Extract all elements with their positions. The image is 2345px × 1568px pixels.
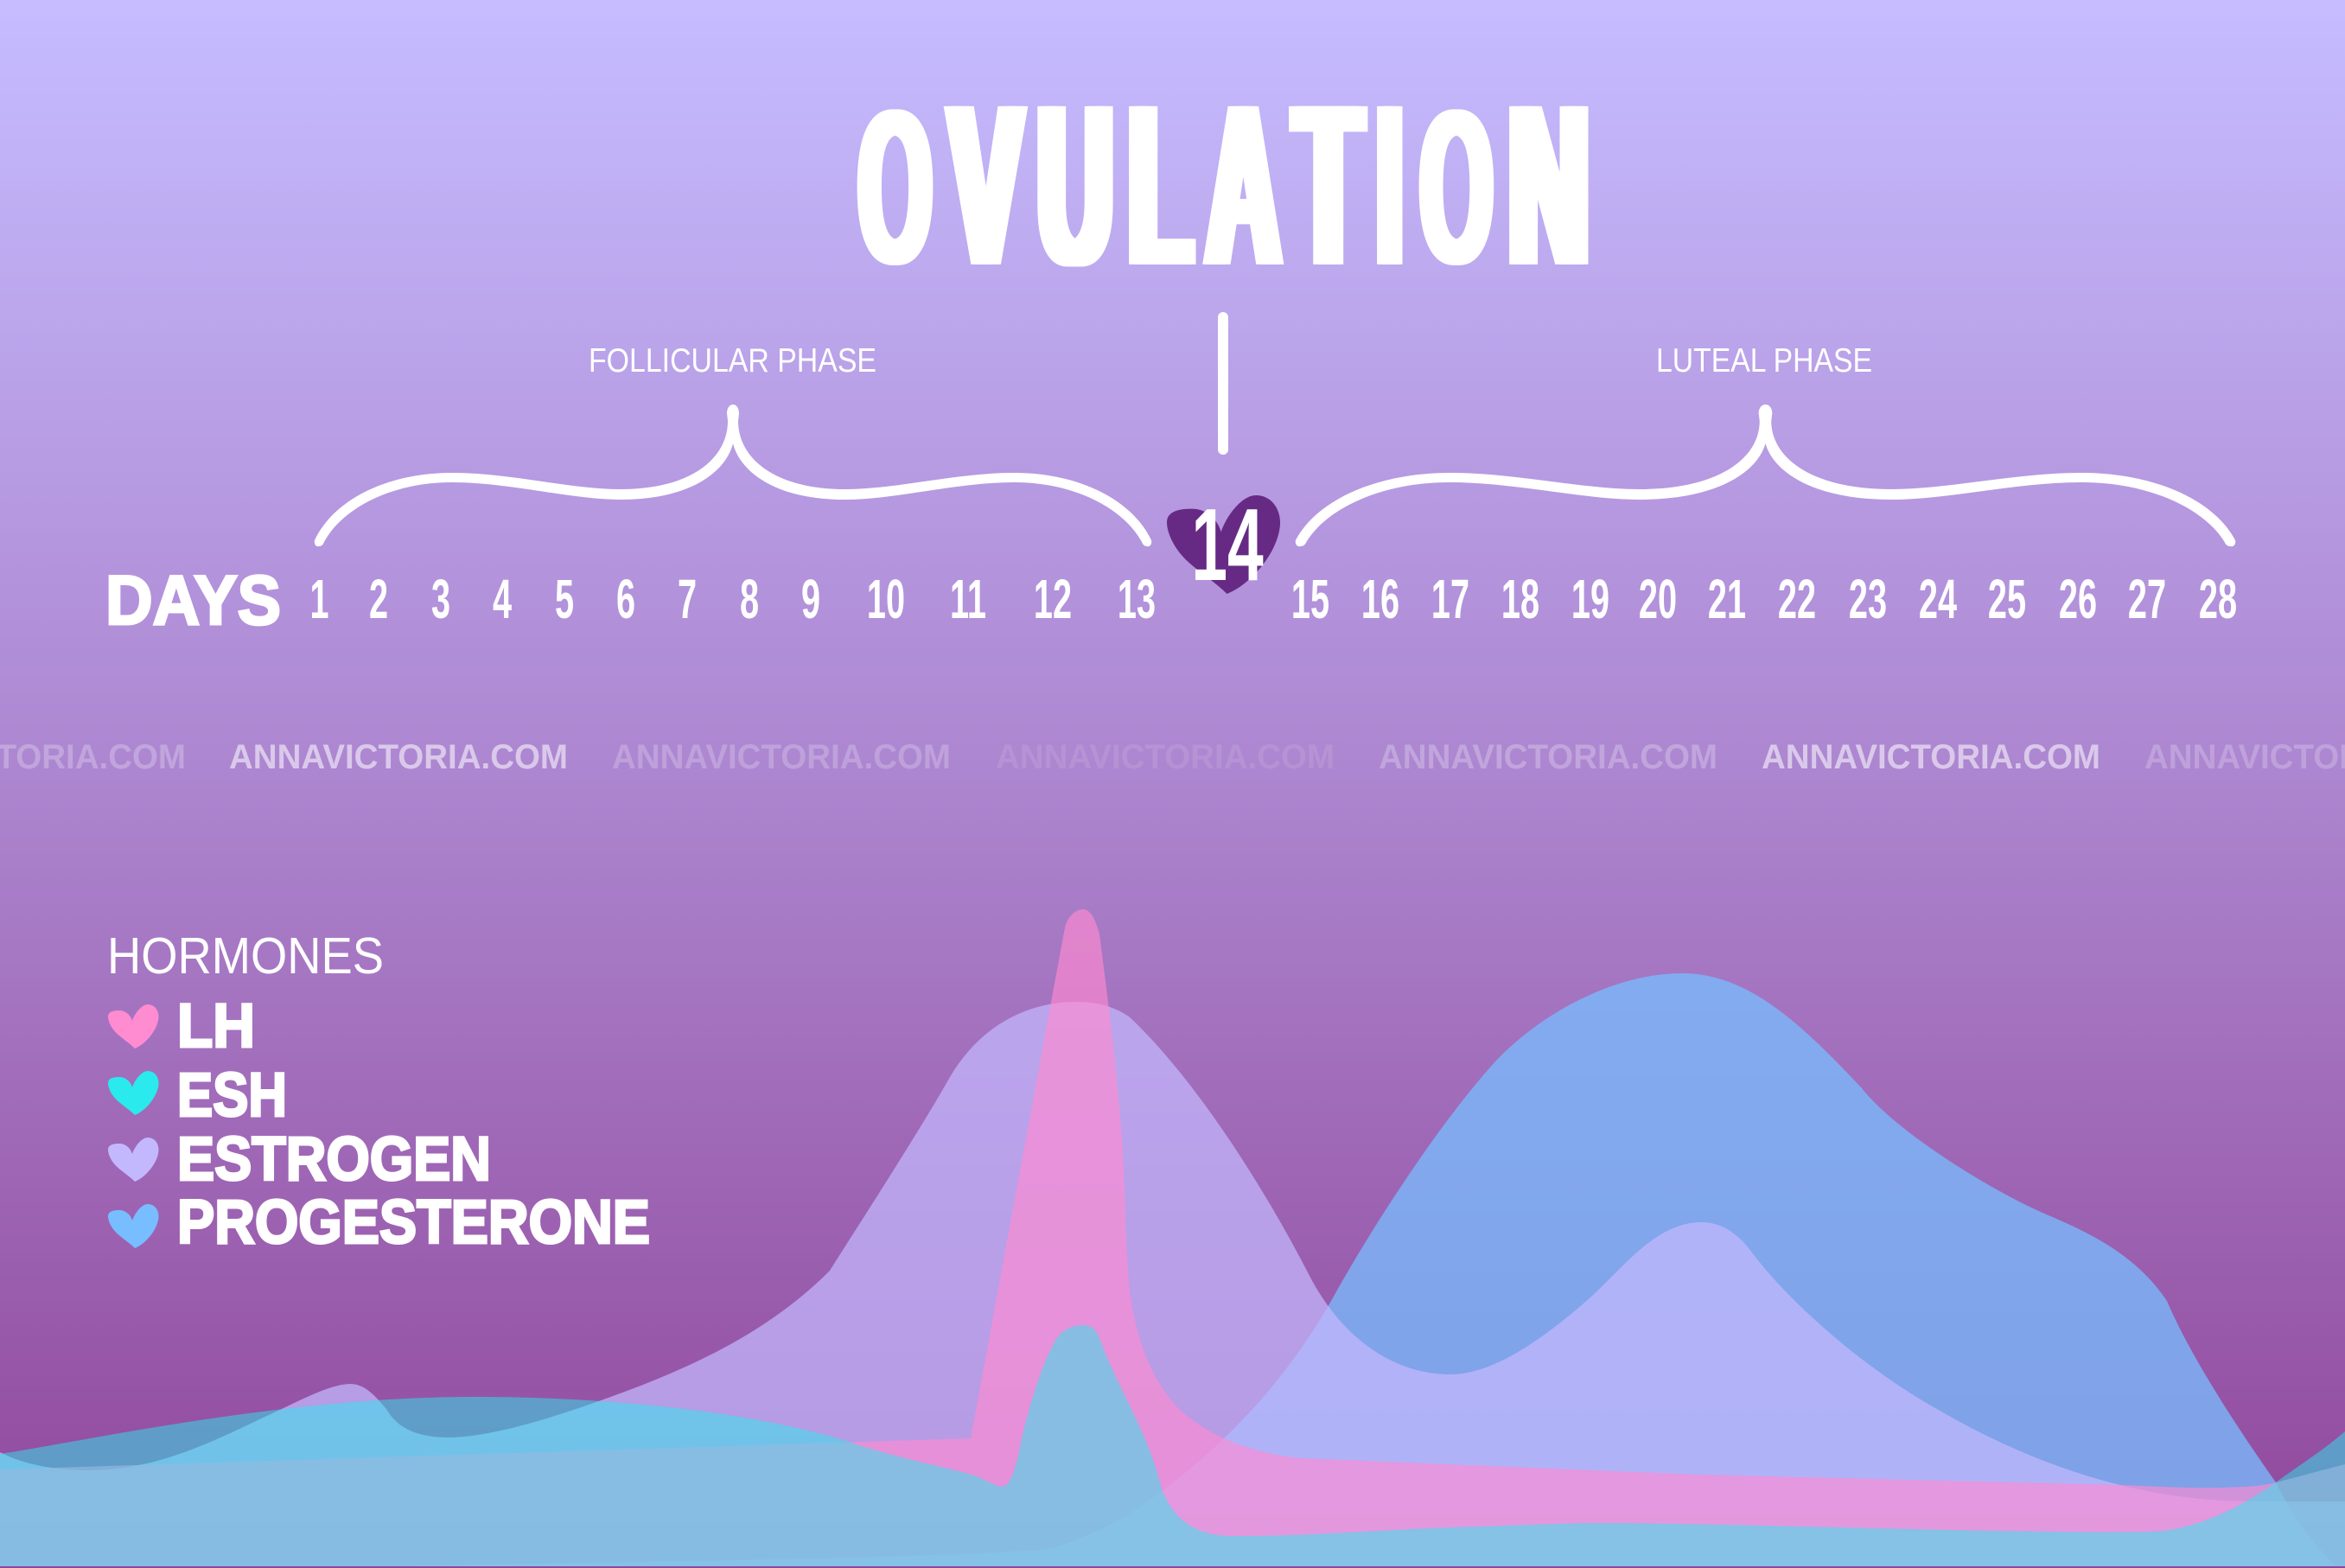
luteal brace	[1296, 405, 2235, 546]
phase label: follicular: FOLLICULAR PHASE	[589, 342, 876, 379]
day numbers row: 1	[309, 570, 329, 630]
icon: ESH heart	[108, 1071, 159, 1115]
title	[855, 58, 1589, 335]
legend label: progesterone: PROGESTERONE	[177, 1189, 650, 1257]
title: O	[855, 74, 935, 335]
legend heading: HORMONES	[107, 927, 384, 985]
watermark row	[0, 738, 2345, 776]
day numbers row: 20	[1639, 570, 1677, 630]
icon: day 14 heart	[1167, 495, 1280, 594]
icon: estrogen heart	[108, 1138, 159, 1182]
title: O	[1416, 74, 1495, 335]
area: FSH	[0, 1325, 2345, 1566]
day numbers row: 7	[678, 570, 697, 630]
title: T	[1295, 58, 1361, 316]
day numbers row: 3	[431, 570, 450, 630]
watermark row: ANNAVICTORIA.COM	[1762, 738, 2100, 776]
phase label: luteal: LUTEAL PHASE	[1656, 342, 1872, 379]
day 14 number: 14	[1191, 488, 1264, 602]
day numbers row: 4	[493, 570, 512, 630]
day numbers row: 2	[369, 570, 388, 630]
area: estrogen	[0, 1002, 2345, 1566]
legend	[107, 927, 650, 1257]
hormone area chart	[0, 909, 2345, 1566]
watermark row: ANNAVICTORIA.COM	[612, 738, 951, 776]
watermark row: ANNAVICTORIA.COM	[996, 738, 1335, 776]
day numbers row: 28	[2199, 570, 2237, 630]
day numbers row: 23	[1849, 570, 1887, 630]
day numbers row: 10	[867, 570, 905, 630]
day numbers row: 11	[950, 570, 986, 630]
legend label: estrogen: ESTROGEN	[177, 1125, 491, 1194]
watermark row: ANNAVICTORIA.COM	[229, 738, 568, 776]
title: L	[1129, 58, 1192, 316]
area: progesterone	[389, 973, 2336, 1566]
day numbers row: 26	[2059, 570, 2097, 630]
icon: progesterone heart	[108, 1204, 159, 1248]
legend label: LH: LH	[177, 992, 255, 1061]
icon: LH heart	[108, 1004, 159, 1049]
day numbers row	[309, 570, 2237, 630]
day numbers row: 16	[1361, 570, 1399, 630]
follicular brace	[315, 405, 1151, 546]
day numbers row: 8	[740, 570, 759, 630]
day numbers row: 6	[616, 570, 635, 630]
watermark row: ANNAVICTORIA.COM	[1379, 738, 1717, 776]
title: V	[950, 58, 1022, 316]
legend label: ESH: ESH	[177, 1061, 287, 1130]
day numbers row: 5	[555, 570, 574, 630]
area: LH	[0, 909, 2345, 1566]
day numbers row: 18	[1501, 570, 1539, 630]
day numbers row: 24	[1919, 570, 1957, 630]
ovulation marker line	[1218, 312, 1228, 455]
day numbers row: 13	[1118, 570, 1156, 630]
day numbers row: 15	[1291, 570, 1329, 630]
title: A	[1207, 58, 1279, 316]
title: I	[1377, 58, 1402, 316]
day numbers row: 27	[2128, 570, 2166, 630]
day numbers row: 25	[1988, 570, 2026, 630]
day numbers row: 22	[1778, 570, 1816, 630]
day numbers row: 12	[1034, 570, 1072, 630]
day numbers row: 17	[1431, 570, 1469, 630]
days label: DAYS	[105, 562, 281, 640]
title: U	[1038, 58, 1112, 316]
day numbers row: 9	[801, 570, 820, 630]
day numbers row: 21	[1708, 570, 1746, 630]
day numbers row: 19	[1571, 570, 1609, 630]
title: N	[1509, 58, 1588, 316]
